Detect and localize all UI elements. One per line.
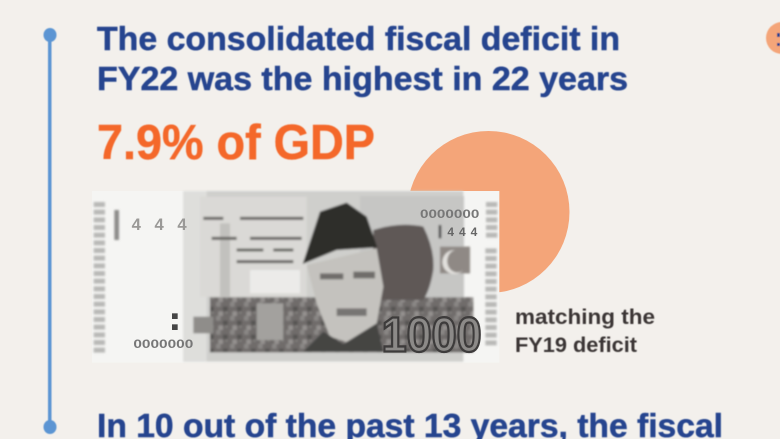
- banknote markings: 0000000: [133, 337, 194, 351]
- orange circle: [408, 131, 570, 293]
- icon: cropped orange badge: [766, 22, 780, 54]
- timeline: [44, 28, 56, 434]
- caption: matching the FY19 deficit: matching the: [515, 306, 655, 329]
- banknote markings: 1000: [382, 307, 482, 362]
- banknote markings: 444: [447, 225, 478, 239]
- caption: matching the FY19 deficit: [515, 306, 655, 357]
- banknote security strips: [99, 202, 492, 355]
- banknote markings: 444: [132, 215, 187, 234]
- heading: fiscal deficit highest in 22 years: FY22 was the highest in 22 years: [97, 60, 628, 97]
- statistic: 7.9% of GDP: 7.9% of GDP: [97, 116, 375, 170]
- caption: matching the FY19 deficit: FY19 deficit: [515, 334, 637, 357]
- banknote markings: 0000000: [420, 207, 480, 221]
- heading: fiscal deficit highest in 22 years: The consolidated fiscal deficit in: [97, 20, 620, 57]
- banknote markings: [132, 207, 482, 362]
- heading: fiscal deficit highest in 22 years: [97, 20, 628, 97]
- banknote illustration: [92, 191, 499, 363]
